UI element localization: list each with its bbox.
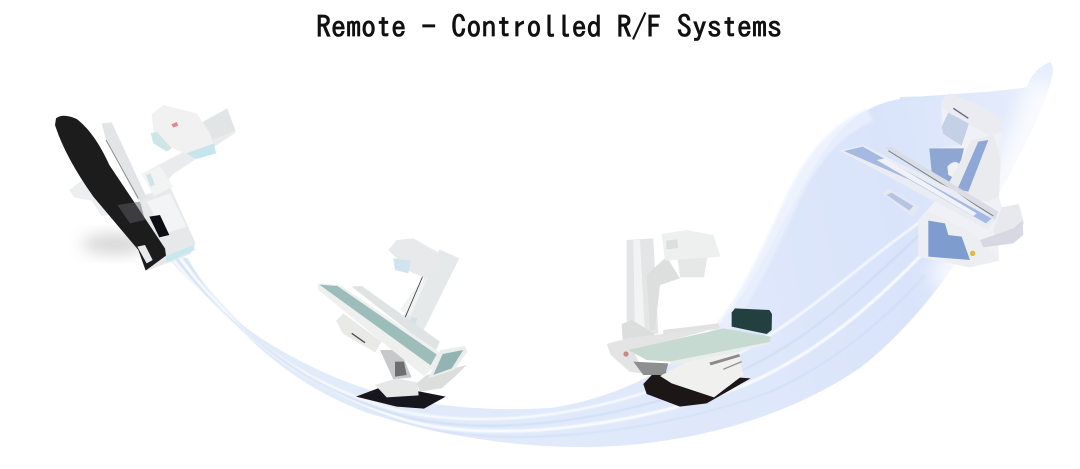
black floor plate bbox=[356, 385, 446, 409]
table edge bbox=[839, 145, 995, 230]
arm bbox=[946, 135, 1001, 202]
red dot bbox=[623, 351, 629, 357]
x-ray tube head bbox=[152, 105, 214, 154]
box label bbox=[352, 333, 365, 343]
red logo mark bbox=[171, 122, 178, 128]
rear rail bbox=[663, 323, 720, 337]
headrest frame bbox=[428, 346, 467, 378]
white rail bbox=[102, 122, 147, 201]
horizontal arm bbox=[142, 125, 236, 196]
teal table top bbox=[319, 285, 437, 365]
support arm bbox=[380, 350, 412, 379]
lower column bbox=[918, 210, 999, 267]
white footer block bbox=[137, 245, 153, 263]
machine 3: horizontal table bbox=[607, 230, 772, 407]
collimator bbox=[677, 257, 707, 277]
blue arm panel bbox=[957, 140, 988, 192]
tube vent bbox=[666, 239, 678, 249]
blue upper panel bbox=[929, 148, 964, 185]
box body bbox=[660, 352, 743, 397]
support dark bbox=[395, 362, 407, 377]
back rest bbox=[732, 308, 772, 334]
tube head bbox=[388, 238, 440, 278]
control box bbox=[883, 188, 919, 217]
headrest bbox=[993, 204, 1024, 240]
column highlight bbox=[633, 240, 645, 337]
collimator bbox=[942, 113, 969, 146]
rear column bbox=[140, 187, 196, 271]
blue lower panel bbox=[928, 221, 970, 260]
yellow warning dot bbox=[970, 251, 975, 256]
tube blue band bbox=[186, 143, 216, 159]
tube head bbox=[662, 230, 721, 261]
rail dark line bbox=[106, 140, 138, 198]
headrest pad bbox=[433, 350, 463, 375]
glass edge bbox=[670, 342, 770, 365]
column light face bbox=[147, 193, 187, 233]
table edge bbox=[317, 283, 442, 376]
column accent bbox=[409, 317, 417, 326]
cable bbox=[403, 273, 424, 322]
collar accent bbox=[146, 173, 155, 187]
base blue glow bbox=[165, 245, 195, 262]
dark inset bbox=[149, 215, 169, 237]
machine silhouette bbox=[918, 93, 1024, 267]
box label bbox=[723, 362, 742, 369]
blue table top bbox=[844, 147, 992, 223]
control box screen bbox=[887, 193, 913, 211]
machine 1: vertical tilted table with black board bbox=[55, 105, 236, 271]
board highlight bbox=[117, 202, 145, 223]
machine 2: tilted table on black base bbox=[317, 238, 467, 409]
title: Remote - Controlled R/F Systems bbox=[316, 12, 782, 42]
column inner bbox=[400, 277, 428, 317]
under table bbox=[633, 362, 668, 375]
foot bracket bbox=[980, 220, 1023, 247]
column bbox=[627, 238, 658, 341]
floor shadow bbox=[82, 235, 148, 253]
left bracket bbox=[69, 179, 114, 216]
black table board bbox=[55, 116, 166, 271]
flowing blue ribbon bbox=[166, 62, 1053, 447]
box stripe bbox=[709, 354, 740, 365]
tube dark strip bbox=[953, 108, 968, 118]
table white stripe bbox=[877, 158, 977, 216]
black floor plate bbox=[643, 372, 751, 407]
control box bbox=[336, 313, 382, 352]
arm top section bbox=[200, 108, 235, 141]
collimator bbox=[393, 258, 411, 273]
collimator side bbox=[151, 132, 172, 152]
column bbox=[402, 249, 459, 332]
column base bbox=[622, 320, 654, 341]
base cover bbox=[375, 378, 419, 397]
foot frame bbox=[417, 365, 467, 392]
rear rail bbox=[884, 147, 998, 221]
arm collar bbox=[142, 166, 173, 196]
glass table bbox=[628, 328, 771, 362]
left table carriage bbox=[607, 327, 722, 374]
tube head bbox=[942, 93, 1002, 136]
rear rail bbox=[352, 286, 440, 352]
machine 4: tilted table with blue panels bbox=[839, 93, 1024, 267]
white cutout bbox=[947, 162, 960, 180]
rail dark bbox=[888, 151, 993, 216]
support arm bbox=[647, 257, 680, 330]
